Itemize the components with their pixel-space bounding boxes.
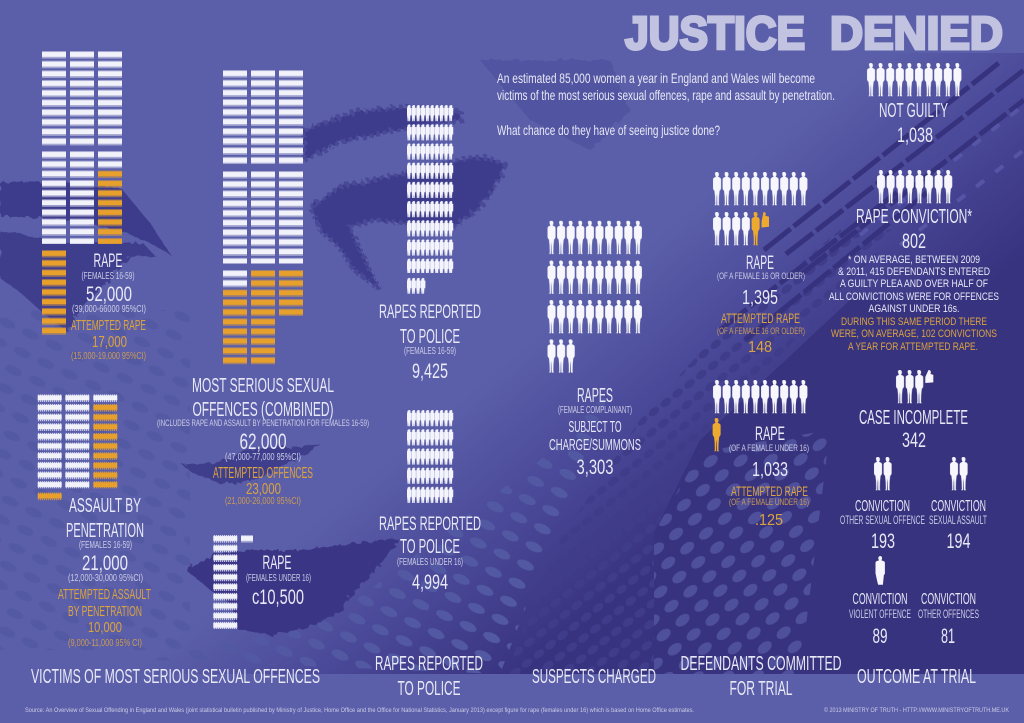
reported 16-59 figures: TO POLICE (400, 326, 460, 348)
panel: suspects charged (546, 221, 642, 479)
assault figures: PENETRATION (66, 520, 144, 542)
defendants under 16 figures: 1,033 (752, 459, 788, 481)
conviction note: AGAINST UNDER 16s. (868, 303, 960, 315)
intro text (497, 70, 835, 138)
heading: victims: VICTIMS OF MOST SERIOUS SEXUAL OFFENCES (31, 666, 320, 688)
violent offence figures (849, 591, 911, 648)
source note: Source: An Overview of Sexual Offending in England and Wales (joint statistical bulletin published by Ministry of Justice, Home Office and the Office for National Statistics, January 2013) except figure for rape (females under 16) which is based on Home Office estimates. (25, 707, 694, 714)
suspects figures: SUBJECT TO (568, 419, 622, 436)
other sexual offence figures: 193 (871, 530, 895, 553)
conviction note (829, 254, 999, 353)
combined figures: MOST SERIOUS SEXUAL (192, 375, 334, 397)
heading: defendants committed for trial: DEFENDANTS COMMITTED (680, 653, 842, 675)
assault figures: 21,000 (82, 552, 128, 575)
heading: rapes reported to police (375, 653, 483, 700)
sexual assault figures: 194 (946, 530, 971, 553)
panel: conviction other sexual offence (840, 457, 925, 553)
title (625, 7, 1003, 59)
suspects figures: 3,303 (576, 456, 614, 479)
pictogram: case incomplete (895, 370, 933, 404)
reported 16-59 figures: RAPES REPORTED (379, 302, 481, 323)
assault figures: BY PENETRATION (68, 603, 142, 620)
pictogram: suspects (546, 221, 642, 373)
conviction note: & 2011, 415 DEFENDANTS ENTERED (838, 266, 990, 278)
rape figures: 17,000 (92, 334, 127, 351)
assault figures: ASSAULT BY (69, 495, 141, 517)
face: right eyebrow (304, 107, 461, 161)
other sexual offence figures: OTHER SEXUAL OFFENCE (840, 513, 925, 527)
reported 16-59 figures: 9,425 (412, 360, 448, 383)
violent offence figures: VIOLENT OFFENCE (849, 607, 911, 621)
intro text: What chance do they have of seeing justice done? (497, 122, 720, 138)
defendants under 16 figures (729, 424, 809, 529)
reported under 16 figures: RAPES REPORTED (379, 514, 481, 535)
rape under 16 figures (246, 553, 311, 609)
other sexual offence figures (840, 498, 925, 553)
defendants under 16 figures: (OF A FEMALE UNDER 16) (729, 443, 809, 454)
combined figures: 62,000 (240, 429, 286, 454)
assault figures: (12,000-30,000 95%CI) (68, 573, 143, 584)
heading: rapes reported to police: RAPES REPORTED (375, 653, 483, 675)
panel: rape conviction (829, 170, 999, 353)
rape figures: RAPE (94, 251, 122, 272)
face: left eyebrow (0, 181, 171, 255)
rape figures: (39,000-66000 95%CI) (72, 304, 146, 315)
pictogram: rape conviction (876, 170, 953, 204)
assault figures: (9,000-11,000 95% CI) (68, 638, 142, 649)
conviction note: A GUILTY PLEA AND OVER HALF OF (840, 278, 988, 290)
combined figures: OFFENCES (COMBINED) (192, 399, 334, 421)
sexual assault figures (929, 498, 987, 553)
pictogram: combined column 1 (223, 70, 247, 364)
violent offence figures: CONVICTION (852, 591, 908, 608)
pictogram: reported 16-59 (407, 105, 454, 294)
panel: case incomplete (859, 370, 968, 452)
pictogram: rape column 3 (98, 51, 122, 244)
conviction note: * ON AVERAGE, BETWEEN 2009 (848, 254, 980, 266)
face: right eye (311, 157, 507, 289)
rape figures: 52,000 (86, 283, 132, 306)
defendants rape figures: ATTEMPTED RAPE (721, 310, 800, 326)
defendants rape figures: 148 (748, 339, 772, 356)
combined figures: (21,000-26,000 95%CI) (225, 496, 301, 507)
heading: defendants committed for trial (680, 653, 842, 700)
not guilty figures: 1,038 (897, 124, 933, 147)
pictogram: combined column 2 (251, 70, 275, 364)
panel: rape females under 16 (213, 535, 311, 629)
face: lips (186, 539, 400, 636)
heading: suspects charged: SUSPECTS CHARGED (532, 666, 656, 688)
defendants rape figures: 1,395 (742, 287, 778, 309)
combined figures: ATTEMPTED OFFENCES (213, 465, 313, 482)
reported 16-59 figures: (FEMALES 16-59) (404, 346, 456, 357)
rape figures: (15,000-19,000 95%CI) (71, 351, 146, 362)
panel: conviction other offences: 81 (941, 625, 955, 648)
pictogram: rape under 16 (213, 535, 253, 629)
rape under 16 figures: c10,500 (252, 586, 304, 609)
pictogram: other sexual offence (873, 457, 892, 492)
pictogram: reported under 16 (407, 410, 454, 503)
pictogram: defendants rape under 16 (712, 380, 808, 451)
panel: conviction violent offence (849, 556, 911, 648)
reported under 16 figures: TO POLICE (400, 536, 460, 558)
conviction heading (856, 206, 972, 253)
combined figures: 23,000 (246, 481, 281, 498)
suspects figures: (FEMALE COMPLAINANT) (558, 405, 632, 416)
conviction heading: 802 (902, 230, 926, 253)
rape figures: (FEMALES 16-59) (82, 271, 134, 282)
face: smear (182, 445, 321, 484)
case incomplete figures: 342 (902, 429, 926, 452)
panel: defendants rape under 16 (712, 380, 809, 529)
defendants rape figures: RAPE (746, 253, 774, 274)
rape figures (71, 251, 146, 362)
panel: assault by penetration (38, 394, 151, 649)
not guilty figures: NOT GUILTY (879, 100, 948, 122)
panel: reported females under 16 (379, 410, 481, 594)
rape under 16 figures: (FEMALES UNDER 16) (246, 573, 311, 584)
reported under 16 figures (379, 514, 481, 594)
defendants rape figures: (OF A FEMALE 16 OR OLDER) (717, 326, 805, 337)
defendants rape figures: (OF A FEMALE 16 OR OLDER) (717, 271, 805, 282)
panel: conviction other offences: CONVICTION (921, 591, 976, 608)
reported 16-59 figures (379, 302, 481, 383)
rape figures: ATTEMPTED RAPE (71, 318, 146, 334)
combined figures: (INCLUDES RAPE AND ASSAULT BY PENETRATION FOR FEMALES 16-59) (157, 418, 369, 429)
assault figures: (FEMALES 16-59) (79, 540, 132, 551)
suspects figures: CHARGE/SUMMONS (549, 437, 641, 454)
title: DENIED (830, 7, 1003, 59)
panel: conviction other offences (918, 591, 979, 648)
case incomplete figures (859, 407, 968, 452)
defendants under 16 figures: (OF A FEMALE UNDER 16) (729, 497, 809, 508)
assault figures (58, 495, 151, 649)
title: JUSTICE (625, 7, 805, 59)
violent offence figures: 89 (872, 625, 888, 648)
other sexual offence figures: CONVICTION (855, 498, 910, 515)
face: left eye (0, 231, 157, 332)
pictogram: not guilty (866, 63, 962, 97)
suspects figures: RAPES (577, 385, 613, 407)
panel: conviction sexual assault (929, 457, 987, 553)
panel: most serious sexual offences combined (157, 70, 369, 507)
pictogram: defendants rape (712, 172, 808, 246)
combined figures (157, 375, 369, 507)
defendants under 16 figures: ATTEMPTED RAPE (731, 483, 808, 499)
heading: defendants committed for trial: FOR TRIAL (730, 678, 792, 700)
pictogram: combined column 3 (279, 70, 303, 316)
panel: reported females 16-59 (379, 105, 481, 383)
rape under 16 figures: RAPE (262, 553, 292, 574)
reported under 16 figures: 4,994 (412, 571, 448, 594)
defendants under 16 figures: RAPE (755, 424, 785, 445)
pictogram: assault columns (38, 394, 117, 500)
not guilty figures (879, 100, 948, 147)
pictogram: rape column 2 (70, 51, 94, 244)
pictogram: violent offence (876, 556, 885, 585)
panel: defendants rape 16 or older (712, 172, 808, 356)
assault figures: 10,000 (88, 619, 122, 636)
defendants rape figures (717, 253, 805, 356)
suspects figures (549, 385, 641, 479)
heading: rapes reported to police: TO POLICE (398, 678, 460, 700)
reported under 16 figures: (FEMALES UNDER 16) (397, 557, 463, 568)
pictogram: sexual assault (949, 457, 968, 492)
panel: victims rape females 16-59 (42, 51, 146, 362)
pictogram: rape column 1 (42, 51, 66, 335)
combined figures: (47,000-77,000 95%CI) (225, 452, 301, 463)
conviction note: A YEAR FOR ATTEMPTED RAPE. (848, 341, 978, 353)
intro text: victims of the most serious sexual offences, rape and assault by penetration. (497, 87, 835, 103)
panel: not guilty (866, 63, 962, 147)
assault figures: ATTEMPTED ASSAULT (58, 586, 151, 603)
defendants under 16 figures: .125 (755, 512, 783, 529)
intro text: An estimated 85,000 women a year in England and Wales will become (497, 70, 815, 86)
